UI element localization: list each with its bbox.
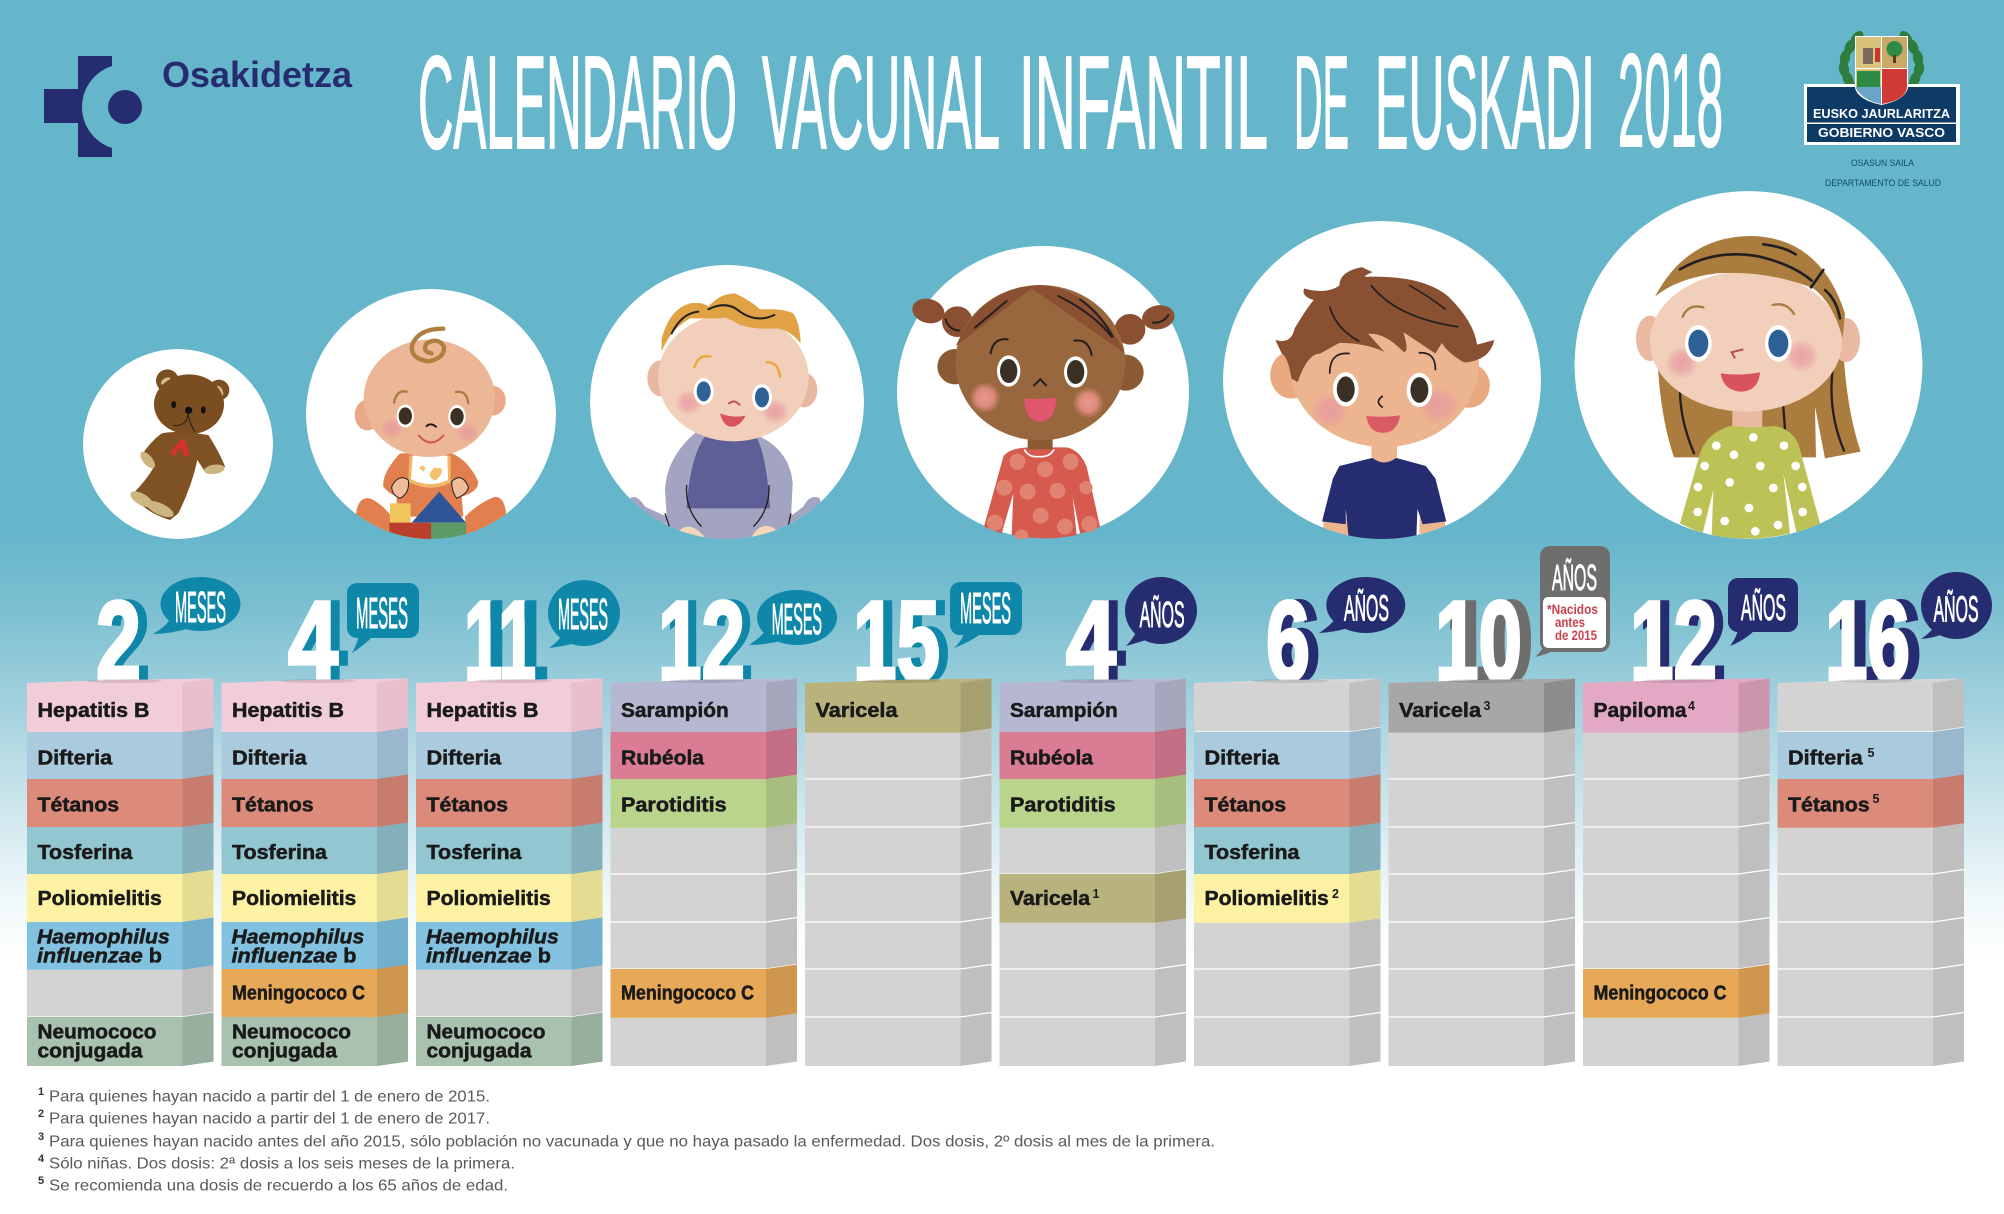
logo: Eusko Jaurlaritza: GOBIERNO VASCO [1818,125,1945,140]
illustration: older girl [1574,191,1922,539]
footnotes: 5 [38,1175,44,1187]
column: 15 meses [805,678,992,1066]
number: 4 años: AÑOS [1140,594,1185,635]
column: 4 meses [222,678,408,1066]
title: INFANTIL [1019,29,1268,176]
text: MESES [558,590,608,639]
number: 12 años: AÑOS [1741,587,1786,628]
logo: Osakidetza: Osakidetza [162,54,353,95]
footnotes: 2 [38,1108,44,1120]
illustration: teddy bear [83,349,273,539]
column: 16 años: 5 [1868,746,1874,760]
column: 16 años: 5 [1872,792,1880,806]
number: 10 años [1435,546,1610,704]
text: MESES [960,584,1011,633]
logo: Eusko Jaurlaritza [1804,29,1960,188]
illustration: boy [1223,221,1541,541]
logo: Eusko Jaurlaritza: EUSKO JAURLARITZA [1813,106,1951,121]
footnotes: Para quienes hayan nacido a partir del 1 de enero de 2015. [49,1089,490,1106]
number: 11 meses: 11 [464,578,536,704]
number: 10 años: AÑOS [1552,557,1597,598]
column: 2 meses [27,678,214,1066]
number: 4 años [1066,577,1197,704]
column: 11 meses [416,678,602,1066]
text: MESES [356,589,408,638]
number: 11 meses: 11 [476,578,548,704]
footnotes: Se recomienda una dosis de recuerdo a los 65 años de edad. [49,1178,508,1195]
number: 10 años: antes [1555,614,1585,630]
number: 16 años: 16 [1825,578,1910,704]
text: MESES [175,583,226,632]
number: 4 años: 4 [1066,578,1116,704]
illustration: baby [306,289,556,543]
footnotes: 3 [38,1131,44,1143]
title [418,27,1723,176]
number: 16 años: 16 [1836,578,1921,704]
number: 12 años: 12 [1630,578,1717,704]
column: 4 años: Varicela [1010,888,1091,910]
column: 15 meses: Varicela [816,700,898,722]
footnotes [38,1086,1215,1195]
title: EUSKADI [1375,29,1595,176]
column: 6 años: 2 [1332,887,1339,901]
illustration: girl with pigtails [897,246,1189,543]
footnotes: Para quienes hayan nacido a partir del 1 de enero de 2017. [49,1110,490,1127]
column: 12 años: Papiloma [1594,700,1687,722]
number: 6 años: 6 [1266,578,1310,704]
column: 4 años [1000,678,1186,1066]
number: 2 meses: 2 [105,578,150,704]
number: 4 meses: 4 [297,578,347,704]
number: 4 meses: 4 [288,578,338,704]
column: 4 años: 1 [1092,887,1100,901]
number: 10 años: 10 [1435,578,1522,704]
title: CALENDARIO [418,29,737,176]
logo: Eusko Jaurlaritza: DEPARTAMENTO DE SALUD [1825,178,1941,188]
column: 12 años: 4 [1688,699,1695,713]
column: 12 meses [610,678,797,1066]
number: 10 años: de 2015 [1555,627,1597,643]
column: 10 años: Varicela [1399,700,1482,722]
number: 12 años: 12 [1639,578,1726,704]
number: 15 meses: 15 [853,578,940,704]
illustration: toddler boy [590,265,864,540]
number: 6 años [1266,577,1405,704]
number: 2 meses [96,577,240,704]
logo: Eusko Jaurlaritza: OSASUN SAILA [1851,158,1914,168]
title: DE [1294,29,1349,176]
column: 16 años [1778,678,1964,1066]
title: VACUNAL [762,29,1000,176]
column: 12 años [1583,678,1770,1066]
number: 10 años: *Nacidos [1547,601,1598,617]
number: 10 años: 10 [1446,578,1533,704]
number: 4 años: 4 [1075,578,1125,704]
number: 15 meses: 15 [862,578,949,704]
text: 2018 [1618,27,1723,174]
number: 12 meses: 12 [666,578,753,704]
logo: Osakidetza [44,54,353,157]
number: 6 años: AÑOS [1344,588,1389,628]
footnotes: Para quienes hayan nacido antes del año 2015, sólo población no vacunada y que no haya pasado la enfermedad. Dos dosis, 2º dosis al mes de la primera. [49,1134,1215,1151]
footnotes: 4 [38,1153,45,1165]
text: MESES [772,595,822,644]
column: 10 años: 3 [1484,699,1490,713]
footnotes: 1 [38,1086,44,1098]
number: 6 años: 6 [1276,578,1320,704]
column: 6 años [1194,678,1380,1066]
footnotes: Sólo niñas. Dos dosis: 2ª dosis a los seis meses de la primera. [49,1155,515,1172]
number: 2 meses: 2 [96,578,141,704]
number: 12 meses: 12 [658,578,745,704]
number: 4 meses [288,578,419,704]
column: 10 años [1388,678,1575,1066]
